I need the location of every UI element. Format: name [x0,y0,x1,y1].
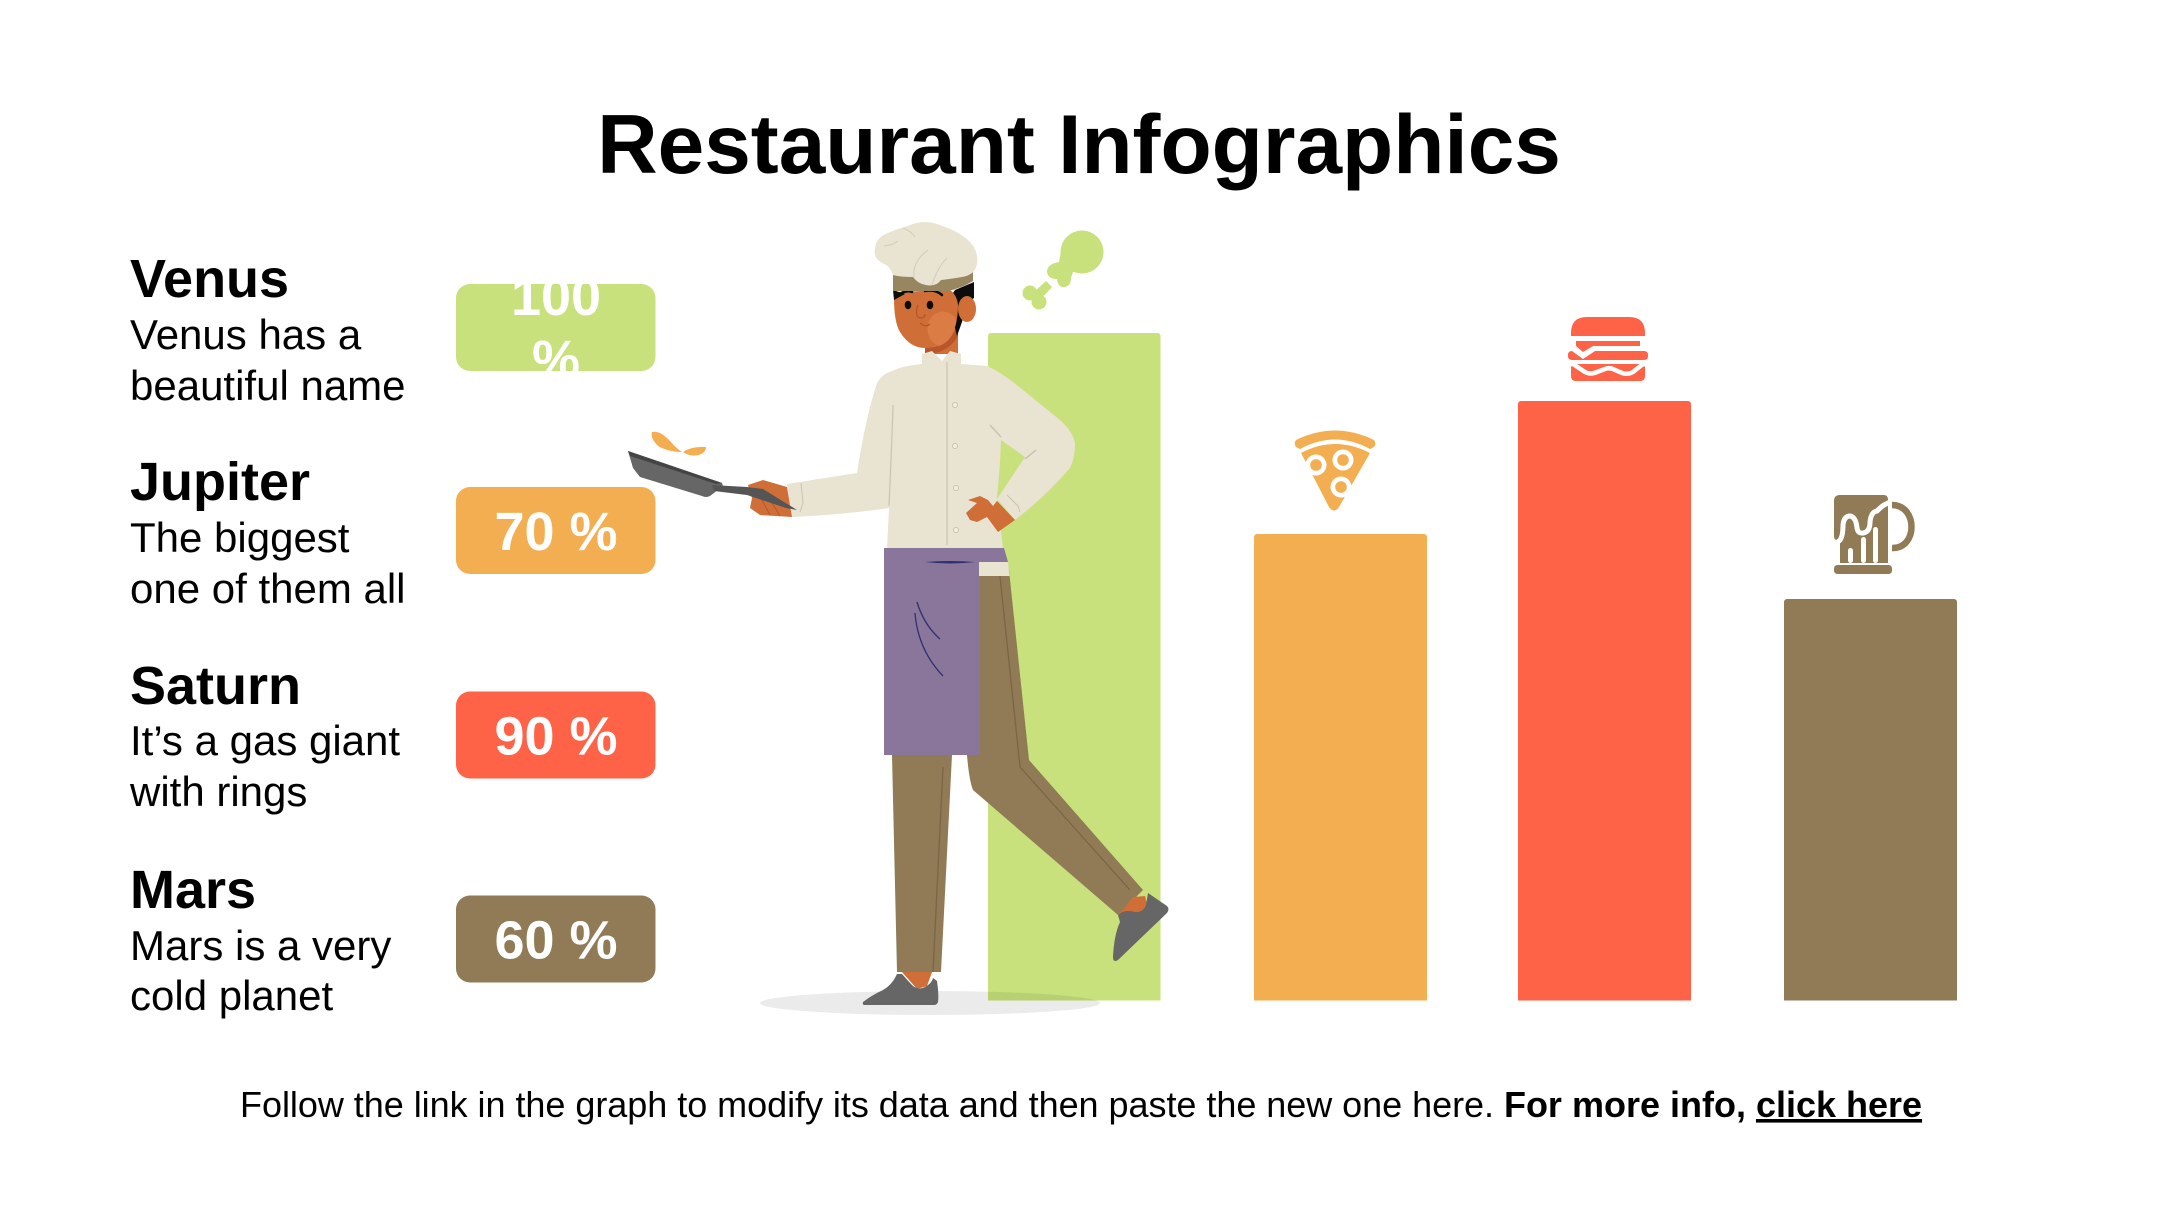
text: Mars description: cold planet [130,972,333,1019]
front leg trousers [892,755,952,972]
chef hat [875,222,977,291]
panel: Jupiter legend [130,452,656,612]
icon: burger [1568,317,1648,381]
bar: Venus [988,333,1160,1000]
badge: 90 percent: 90 % [494,706,618,766]
bar: Saturn [1518,401,1691,1000]
icon: pizza slice [1295,430,1375,510]
badge: 100 percent: % [532,330,580,390]
panel: Mars legend [130,860,656,1019]
frying pan hand [748,480,792,517]
hand on hip [966,496,1015,532]
bar chart [988,333,1957,1000]
flying food [652,432,706,456]
panel: Saturn legend [129,656,656,815]
frying pan [628,451,797,510]
badge: 70 percent [456,487,656,574]
text: Venus description: beautiful name [130,362,406,409]
heading: Saturn: Saturn [130,656,301,716]
text: Mars description: Mars is a very [130,922,391,969]
badge: 70 percent: 70 % [494,502,618,562]
icon: beer mug [1833,495,1912,574]
icon: chicken drumstick [1022,230,1104,310]
text: Saturn description: It’s a gas giant [130,717,400,764]
badge: 60 percent [456,896,656,982]
title: Restaurant Infographics [597,97,1561,191]
heading: Jupiter: Jupiter [130,452,310,512]
heading: Venus: Venus [130,249,289,309]
floor shadow [760,991,1100,1015]
panel: Venus legend [130,249,656,409]
heading: Mars: Mars [130,860,256,920]
badge: 100 percent [456,267,656,390]
back leg trousers [967,570,1143,915]
text: Jupiter description: one of them all [130,565,406,612]
bar: Jupiter [1254,534,1427,1000]
front foot and shoe [863,972,938,1005]
head [893,282,976,354]
text: Venus description: Venus has a [130,311,362,358]
badge: 90 percent [456,692,656,778]
apron [884,548,1010,755]
footer note: Follow the link in the graph to modify its data and then paste the new one here. For more info, click here [240,1084,1922,1125]
chef jacket [787,351,1075,548]
text: Jupiter description: The biggest [130,514,350,561]
illustration: chef with frying pan [628,222,1168,1015]
bar: Mars [1784,599,1957,1000]
text: Saturn description: with rings [129,768,307,815]
back foot and shoe [1113,893,1168,961]
badge: 100 percent: 100 [511,267,601,327]
badge: 60 percent: 60 % [494,910,618,970]
